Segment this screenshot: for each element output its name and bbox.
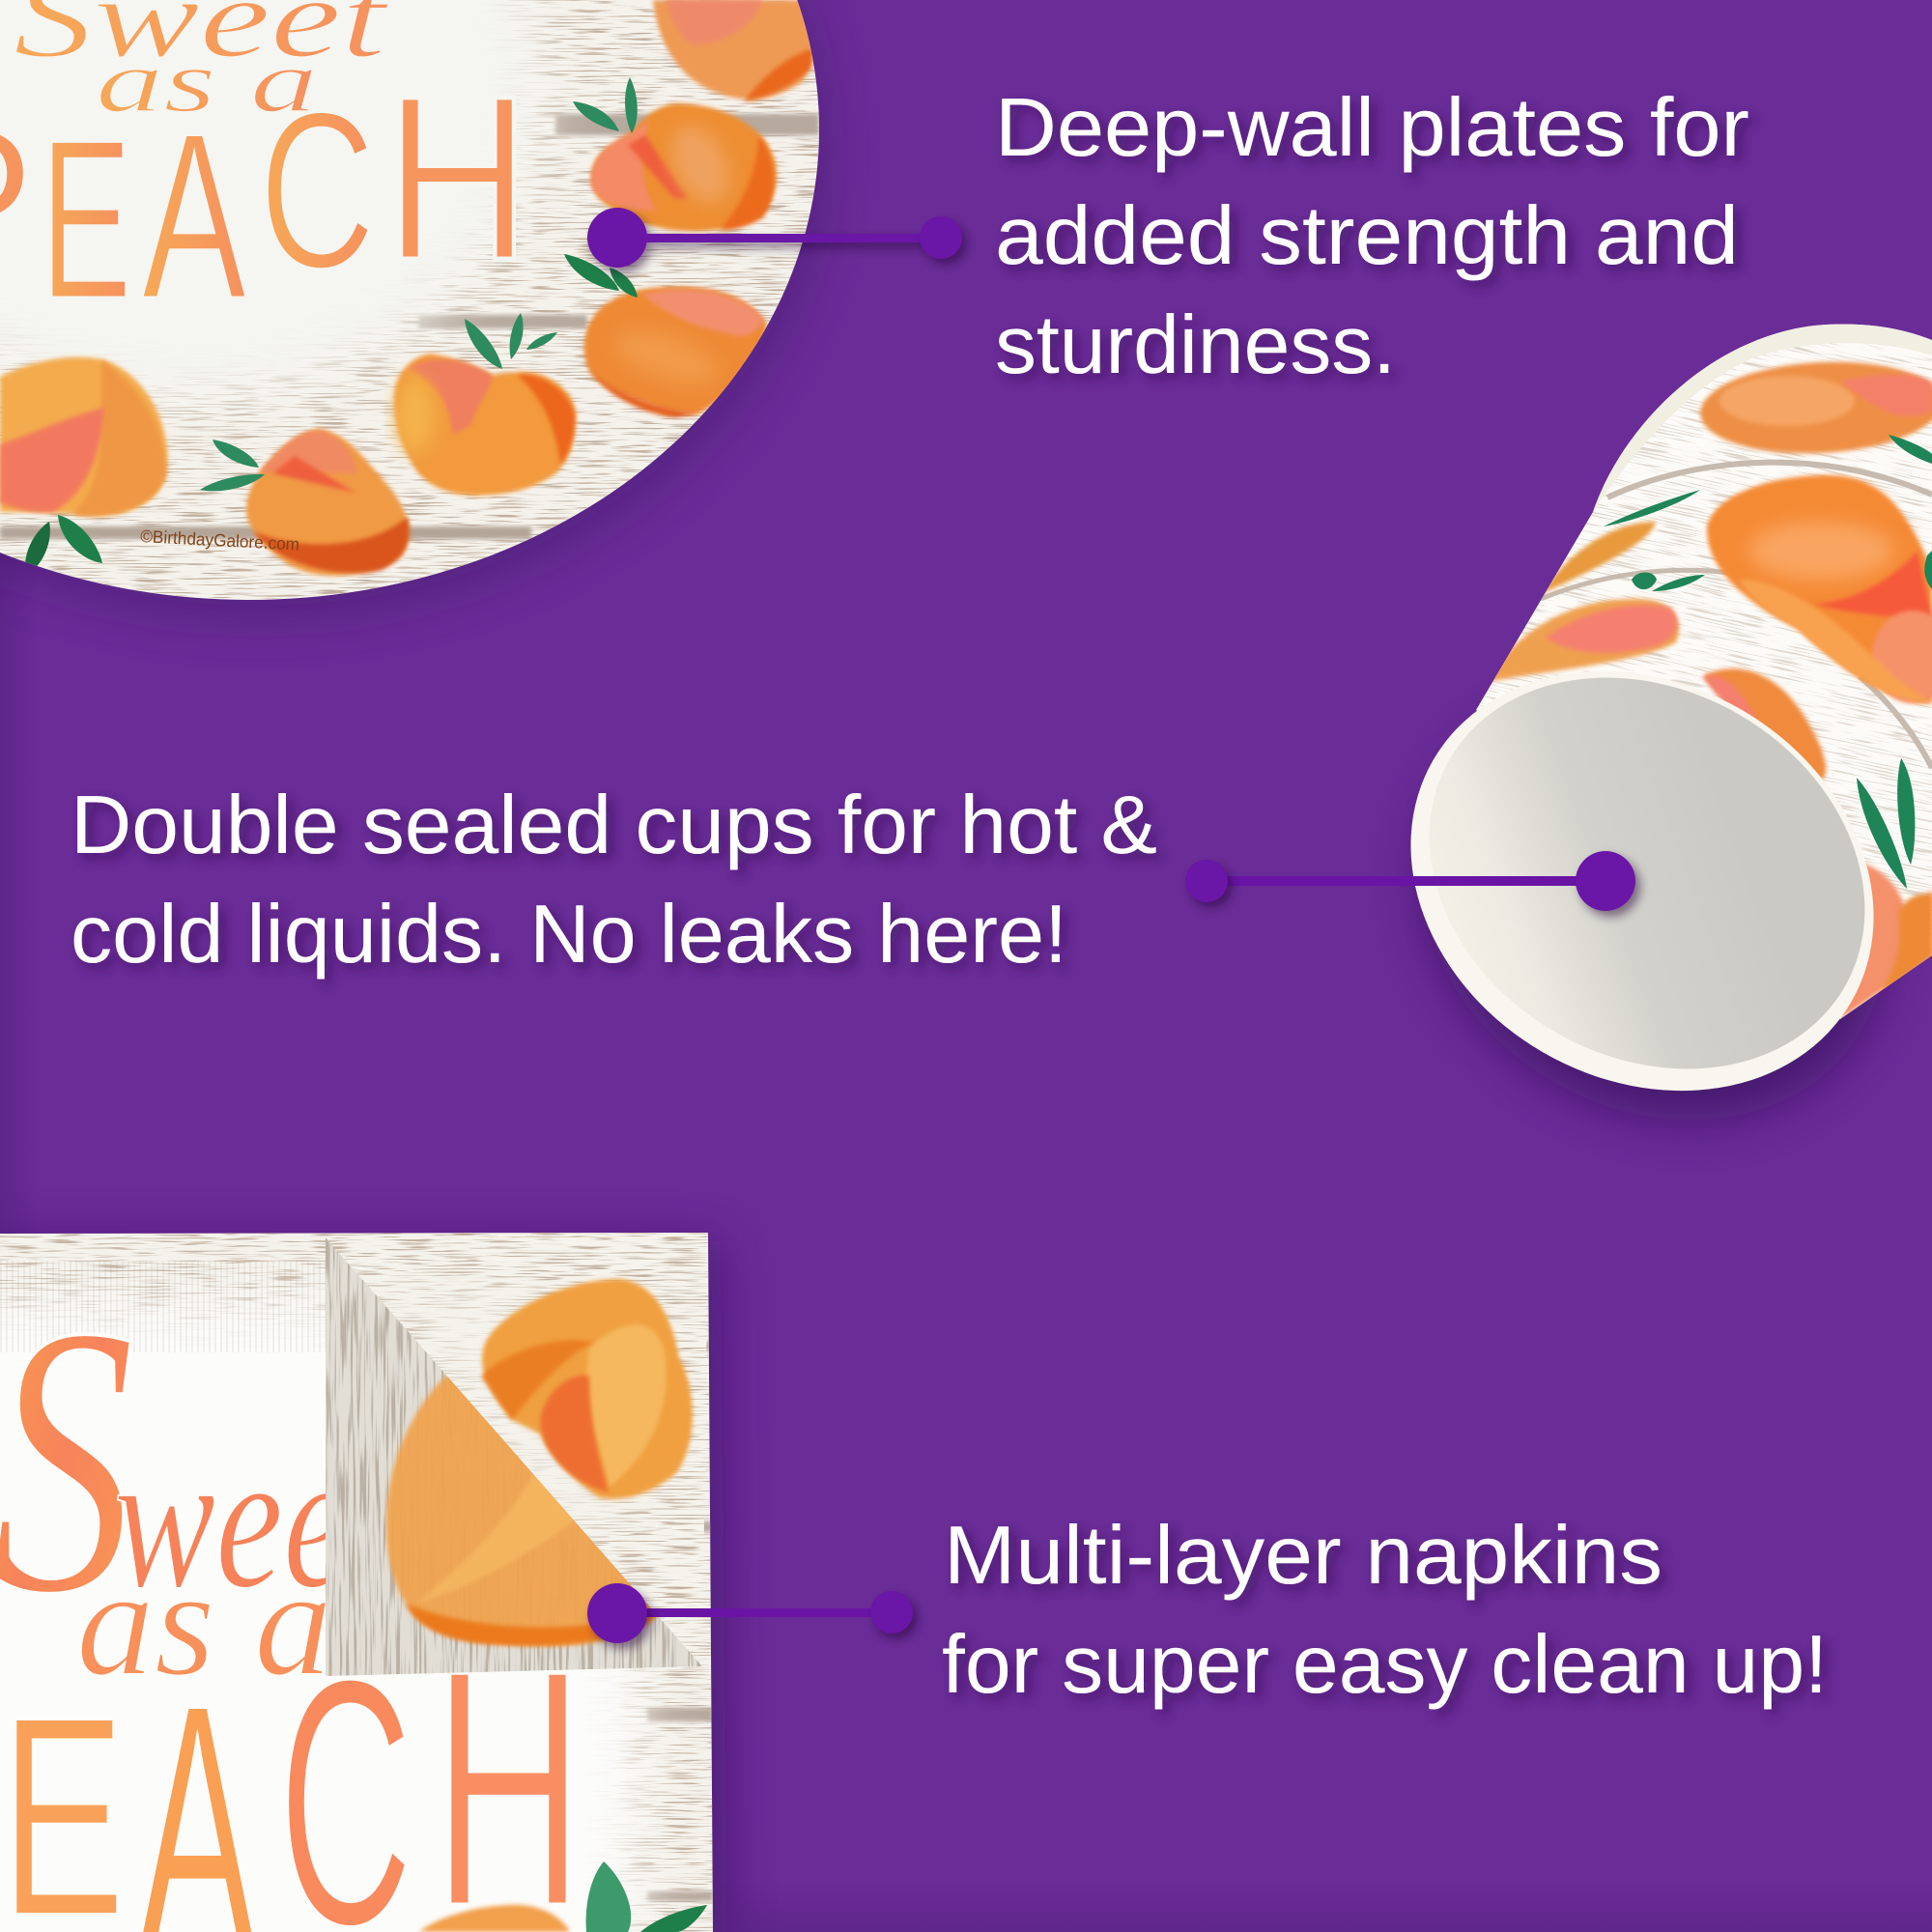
peach 3 xyxy=(584,287,767,417)
text: cups: cold liquids. No leaks here! xyxy=(71,889,1067,980)
peach 6 xyxy=(0,357,167,516)
plate lettering: A xyxy=(142,83,246,348)
callout dot large: plates xyxy=(587,208,647,268)
callout line: napkins xyxy=(617,1608,892,1617)
callout line: cups xyxy=(1207,876,1605,886)
text: plates: Deep-wall plates for xyxy=(995,82,1749,174)
napkin lettering: as a xyxy=(76,1536,332,1708)
cup peach lower right xyxy=(1840,861,1932,1019)
cup base inner xyxy=(1358,600,1932,1147)
callout dot small: cups xyxy=(1185,860,1228,902)
callout dot large: cups xyxy=(1576,851,1635,911)
cup peach lower xyxy=(1486,599,1679,682)
napkin fold lower panel xyxy=(326,1237,712,1682)
cup body xyxy=(1476,325,1932,1019)
cup peach big xyxy=(1707,475,1932,703)
text: plates: sturdiness. xyxy=(995,299,1396,391)
panel: napkin xyxy=(0,1227,726,1932)
napkin lettering xyxy=(0,1247,584,1932)
text: plates xyxy=(995,82,1749,391)
plate lettering: E xyxy=(41,94,131,347)
panel: paper plate xyxy=(0,0,831,621)
callout dot small: napkins xyxy=(870,1591,913,1634)
copyright mark: ©BirthdayGalore.com xyxy=(140,526,300,554)
lower peach xyxy=(386,1367,663,1646)
napkin fold upper panel xyxy=(326,1234,712,1668)
cup peach top xyxy=(1698,356,1932,459)
upper peach xyxy=(481,1279,693,1499)
cup leaves xyxy=(1604,435,1932,889)
peach 5 xyxy=(246,429,409,576)
callout dot large: napkins xyxy=(587,1583,647,1643)
plate leaves xyxy=(25,77,638,576)
panel: paper cup xyxy=(1403,325,1932,1138)
callout line: plates xyxy=(587,208,941,268)
plate lettering: C xyxy=(259,65,376,315)
napkin lettering: wee xyxy=(114,1410,351,1630)
text: napkins: for super easy clean up! xyxy=(942,1619,1828,1711)
text: cups xyxy=(71,780,1157,980)
napkin leaves xyxy=(586,1861,707,1932)
text: cups: Double sealed cups for hot & xyxy=(71,780,1157,871)
cup peach near base xyxy=(1703,668,1826,781)
peach 2 xyxy=(591,103,777,231)
peach 4 xyxy=(394,354,576,496)
text: napkins: Multi-layer napkins xyxy=(944,1510,1662,1602)
cup base rim xyxy=(1334,588,1932,1174)
peach 1 xyxy=(653,0,813,101)
cup peach slice left xyxy=(1541,522,1656,594)
callout dot small: plates xyxy=(920,216,962,259)
plate lettering: H xyxy=(384,47,530,310)
text: napkins xyxy=(942,1510,1828,1711)
plate lettering xyxy=(0,0,530,348)
cup rim lip xyxy=(1593,324,1932,512)
napkin bottom peach xyxy=(419,1905,570,1932)
plate lettering: as a xyxy=(96,32,318,130)
text: plates: added strength and xyxy=(995,190,1739,282)
